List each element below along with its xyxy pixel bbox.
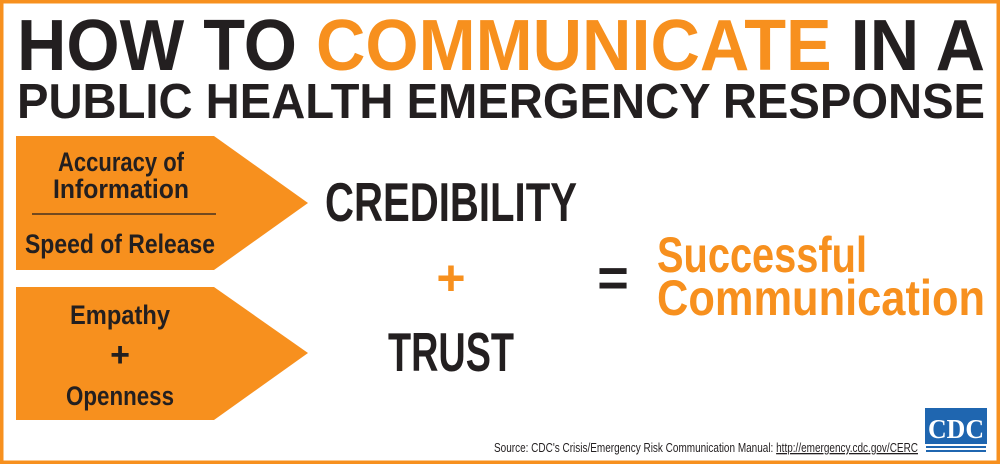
title: HOW TO COMMUNICATE IN A <box>17 6 985 86</box>
credibility: CREDIBILITY <box>325 171 577 233</box>
icon: CDC logo: CDC <box>928 414 984 444</box>
title <box>17 6 985 129</box>
successful communication: Successful <box>657 227 867 283</box>
arrow: accuracy and speed: Information <box>53 174 189 204</box>
arrow: empathy and openness <box>16 287 308 420</box>
arrow: accuracy and speed: Speed of Release <box>25 229 215 259</box>
successful communication <box>657 227 985 326</box>
equals sign: = <box>597 248 629 308</box>
arrow: empathy and openness: Empathy <box>70 300 170 330</box>
arrow: accuracy and speed <box>16 136 308 270</box>
title: PUBLIC HEALTH EMERGENCY RESPONSE <box>17 75 985 129</box>
icon: CDC logo <box>925 408 987 452</box>
source: Source: CDC's Crisis/Emergency Risk Communication Manual: http://emergency.cdc.gov/CERC <box>494 440 918 455</box>
arrow: empathy and openness: Openness <box>66 381 174 411</box>
plus sign: + <box>436 250 466 306</box>
arrow: empathy and openness: + <box>110 336 130 374</box>
trust: TRUST <box>388 321 514 383</box>
arrow: accuracy and speed: Accuracy of <box>58 147 185 177</box>
